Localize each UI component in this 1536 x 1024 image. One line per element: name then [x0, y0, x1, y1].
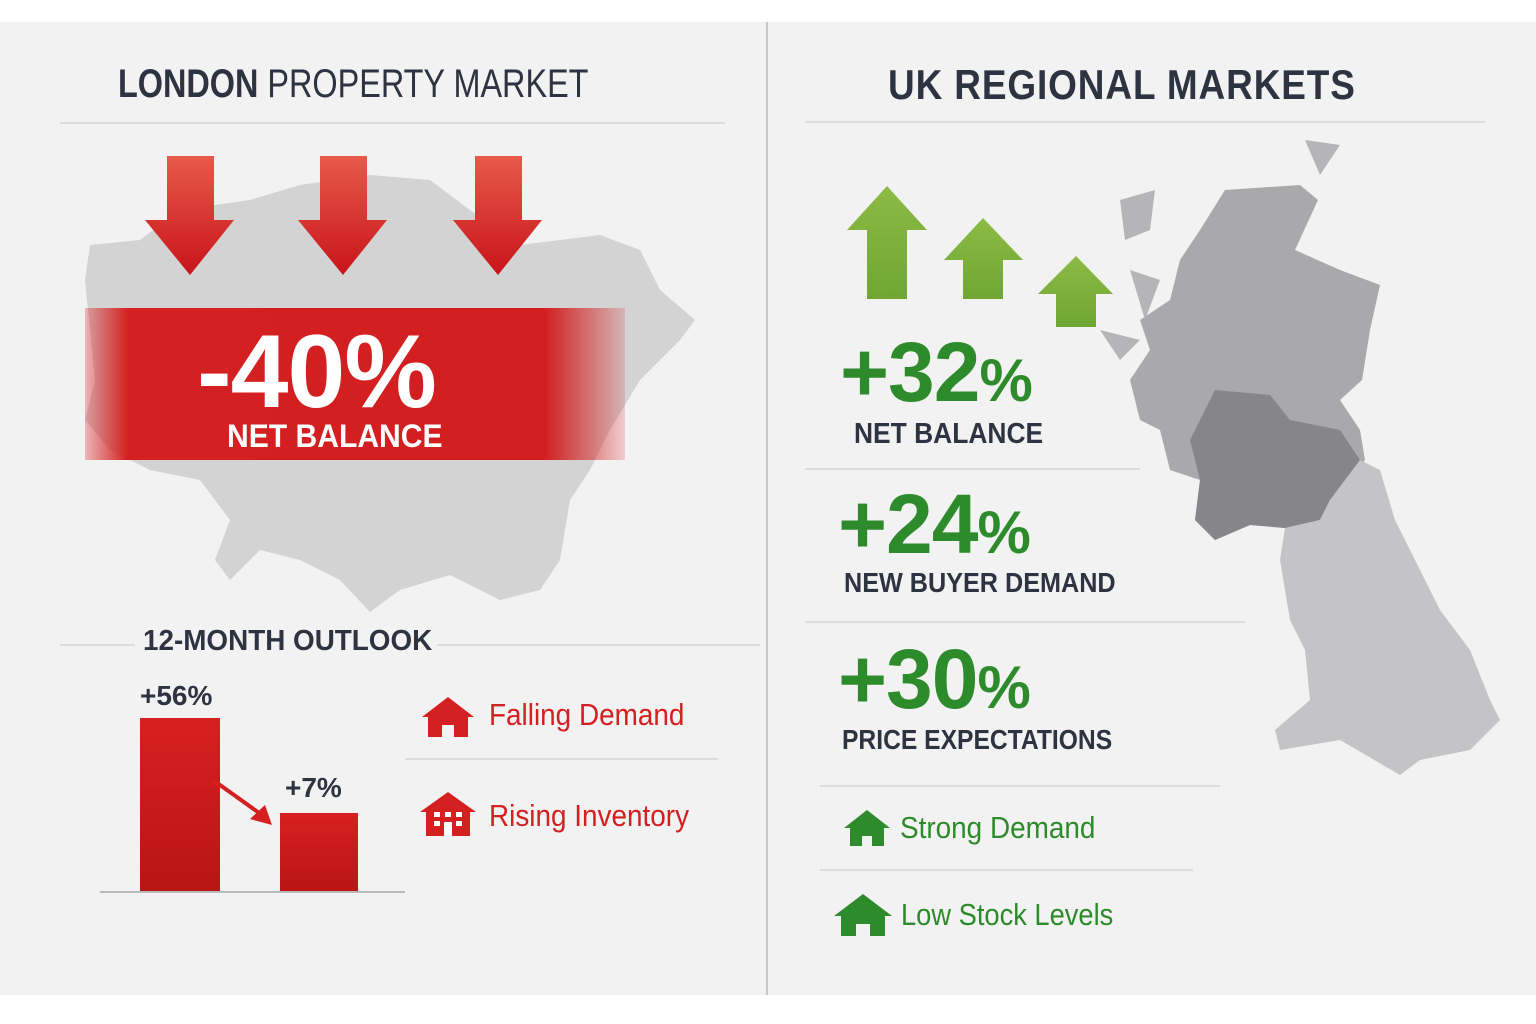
banner: -40% net balance	[85, 308, 625, 460]
item: rising inventory	[420, 792, 689, 836]
item: strong demand: Strong Demand	[900, 810, 1095, 845]
item: low stock levels	[834, 894, 1113, 936]
banner: -40% net balance: NET BALANCE	[227, 418, 443, 454]
item: falling demand	[422, 697, 684, 737]
item: low stock levels: Low Stock Levels	[901, 897, 1113, 932]
map: UK	[1100, 140, 1500, 775]
item: rising inventory: Rising Inventory	[489, 798, 689, 833]
panel: London	[60, 62, 760, 893]
stat: +30% price expectations	[838, 632, 1112, 755]
panel: UK regional	[805, 61, 1500, 936]
stat: +30% price expectations: +30%	[838, 632, 1030, 726]
stat: +24% new buyer demand: +24%	[838, 477, 1030, 571]
bar chart	[100, 680, 405, 893]
item: falling demand: Falling Demand	[489, 697, 684, 732]
red arrows	[145, 156, 542, 275]
stat: +30% price expectations: PRICE EXPECTATIONS	[842, 724, 1112, 755]
stat: +32% net balance: NET BALANCE	[854, 418, 1043, 450]
map: London	[85, 175, 695, 612]
title: UK regional markets: UK REGIONAL MARKETS	[888, 61, 1356, 108]
stat: +24% new buyer demand: NEW BUYER DEMAND	[844, 567, 1116, 598]
bar chart: +56%	[140, 680, 212, 711]
green arrows	[847, 186, 1113, 327]
title: London: LONDON PROPERTY MARKET	[118, 62, 588, 106]
bar chart: +7%	[285, 772, 342, 803]
heading: 12-month outlook: 12-MONTH OUTLOOK	[143, 625, 432, 657]
stat: +32% net balance: +32%	[840, 325, 1032, 419]
banner: -40% net balance: -40%	[197, 314, 436, 430]
stat: +24% new buyer demand	[838, 477, 1116, 598]
